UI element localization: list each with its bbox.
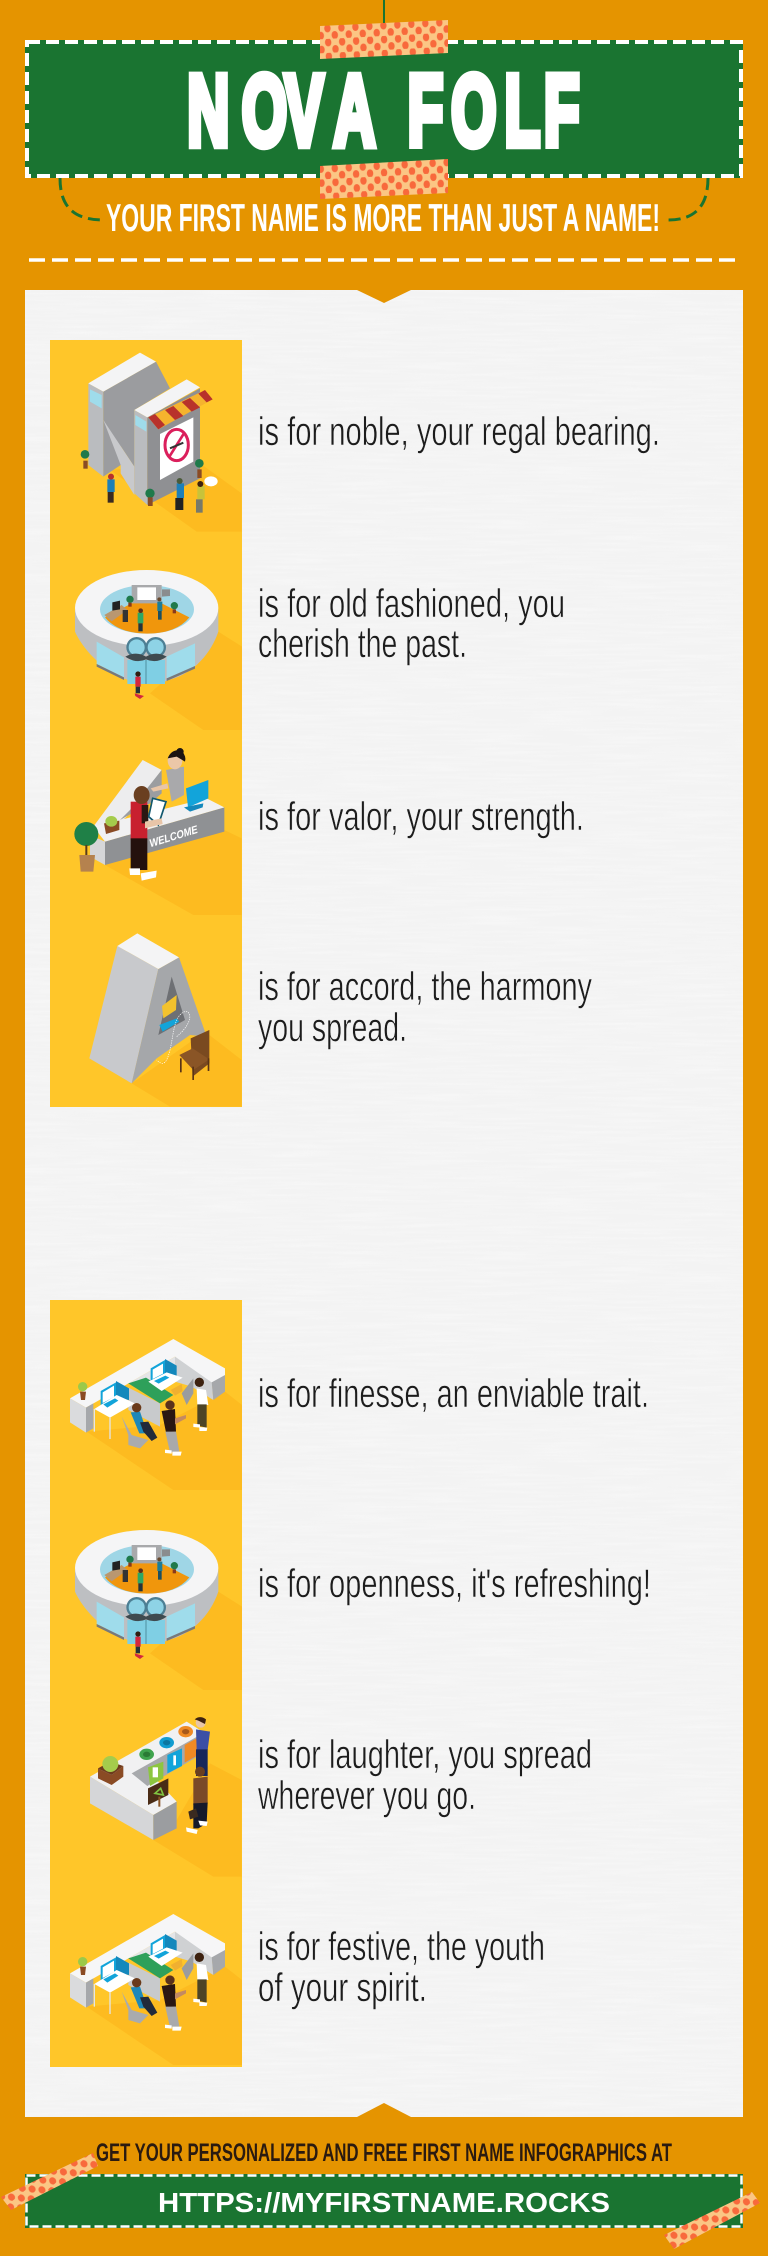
dashed connector left: [60, 178, 104, 220]
icon: letter V reception desk: WELCOME: [149, 824, 198, 850]
icon: letter N building: [81, 353, 242, 532]
title: NOVA FOLF: [187, 56, 579, 167]
text: A line 2: you spread.: [258, 1006, 407, 1050]
dashed divider: [29, 258, 739, 262]
icon: letter A monument: [89, 933, 242, 1107]
footer banner: [25, 2174, 743, 2228]
footer url: HTTPS://MYFIRSTNAME.ROCKS: [158, 2187, 610, 2218]
panel: main paper: [25, 290, 743, 2117]
text: V: is for valor, your strength.: [258, 795, 584, 839]
icon: letter V reception desk: [74, 748, 242, 915]
dashed connector right: [668, 178, 708, 220]
title banner: [25, 40, 743, 178]
top hanging string: [383, 0, 385, 26]
tape: banner top: [320, 20, 448, 59]
icon: letter F office desk: [70, 1339, 242, 1490]
panel: yellow strip last name: [50, 1300, 242, 2067]
tape: footer left: [1, 2153, 98, 2210]
text: F2 line 1: is for festive, the youth: [258, 1925, 545, 1969]
text: L line 1: is for laughter, you spread: [258, 1733, 592, 1777]
text: A line 1: is for accord, the harmony: [258, 965, 592, 1009]
text: L line 2: wherever you go.: [257, 1774, 476, 1818]
icon: letter L recycling counter: [90, 1717, 242, 1877]
text: F2 line 2: of your spirit.: [258, 1966, 427, 2010]
tape: banner bottom: [320, 159, 448, 199]
icon: letter F office desk repeated: [70, 1914, 242, 2065]
text: O line 2: cherish the past.: [258, 622, 467, 666]
notch: top: [357, 290, 411, 303]
icon: letter O glasses shop: [75, 570, 242, 730]
tape: footer right: [664, 2192, 760, 2249]
text: O line 1: is for old fashioned, you: [258, 582, 565, 626]
icon: letter O glasses shop repeated: [75, 1530, 242, 1690]
panel: yellow strip first name: [50, 340, 242, 1107]
notch: bottom: [357, 2103, 411, 2117]
